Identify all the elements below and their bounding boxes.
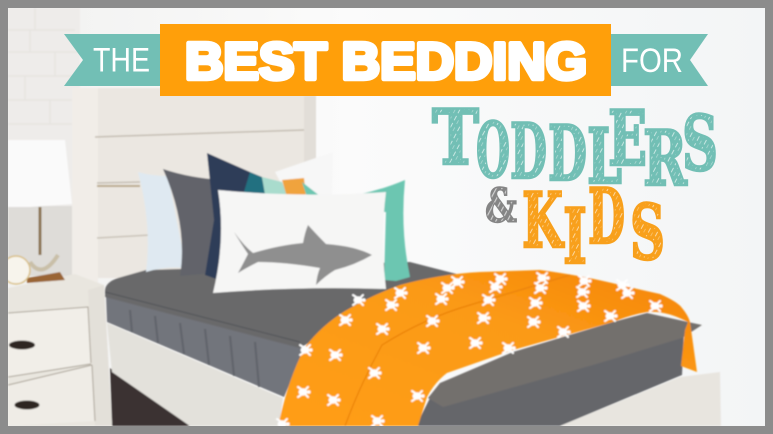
mattress end — [416, 330, 684, 426]
pillow: shark — [213, 190, 386, 293]
ribbon: FOR — [611, 34, 708, 86]
heading: TODDLERS: T — [432, 93, 479, 182]
drawer handles — [9, 340, 40, 410]
heading: TODDLERS: L — [587, 112, 622, 201]
heading: ampersand: & — [485, 179, 517, 234]
nightstand — [8, 274, 112, 426]
heading: TODDLERS: D — [548, 109, 587, 198]
ribbon: THE — [64, 34, 161, 86]
orange comforter — [277, 270, 697, 429]
title banner: BEST BEDDING: BEST BEDDING — [185, 33, 587, 91]
icon: shark silhouette — [234, 225, 372, 285]
pillow: patterned blue-white — [138, 172, 186, 272]
ribbon: FOR: FOR — [621, 42, 683, 80]
mattress side — [106, 296, 305, 397]
heading: TODDLERS — [432, 93, 718, 203]
heading: TODDLERS: R — [643, 114, 688, 203]
pillow: dark grey — [163, 169, 226, 276]
heading: KIDS — [522, 172, 665, 281]
headboard — [72, 88, 316, 284]
heading: KIDS: K — [522, 176, 565, 265]
bed frame foot — [560, 372, 721, 426]
alarm clock — [2, 256, 30, 284]
bed under-shadow — [110, 368, 190, 426]
brick wall — [8, 8, 80, 276]
heading: TODDLERS: S — [682, 99, 718, 188]
ribbon: THE: THE — [93, 42, 150, 80]
bed frame side rail — [107, 323, 283, 426]
heading: TODDLERS: O — [476, 106, 510, 195]
table lamp — [8, 140, 72, 283]
heading: KIDS: S — [630, 188, 665, 277]
mattress top — [105, 262, 480, 348]
pillow: striped navy — [205, 153, 308, 282]
heading: KIDS: I — [563, 192, 587, 281]
duvet fold — [428, 313, 702, 407]
pillow: teal — [302, 180, 410, 281]
pillow: white rear — [275, 152, 333, 200]
heading: TODDLERS: D — [510, 107, 547, 196]
turtle print — [277, 273, 663, 429]
heading: TODDLERS: E — [608, 94, 647, 183]
heading: KIDS: D — [588, 172, 625, 261]
